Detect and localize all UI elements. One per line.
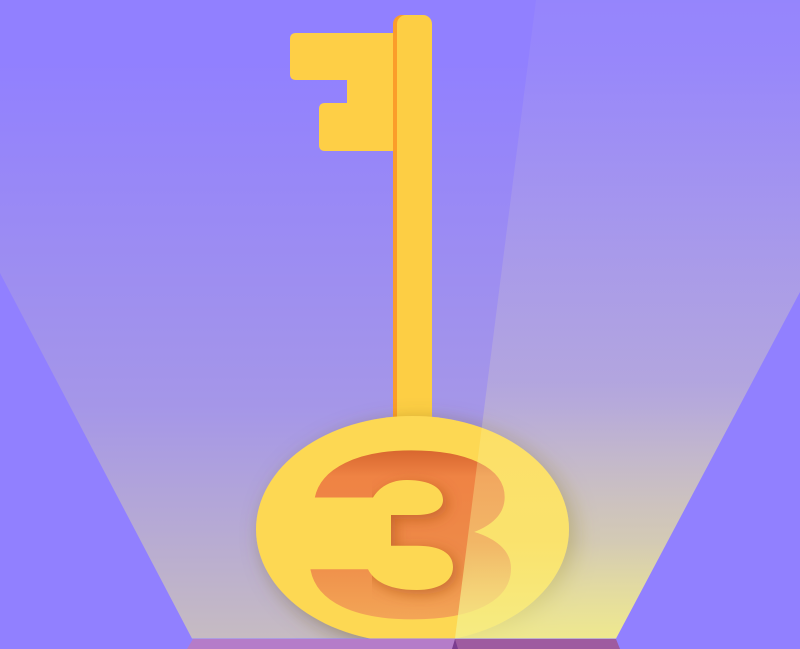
coin <box>256 416 569 643</box>
key shaft <box>397 15 432 425</box>
pedestal: right face <box>453 639 620 649</box>
pedestal: dark fold <box>452 639 458 649</box>
key shaft shadow edge <box>393 15 406 417</box>
light beam: brighter right half <box>455 0 800 638</box>
key <box>256 15 569 649</box>
counter of 3 <box>296 480 453 590</box>
pedestal: left face <box>187 639 455 649</box>
inner shadow of 3 <box>372 479 462 600</box>
key bit teeth <box>290 33 398 151</box>
